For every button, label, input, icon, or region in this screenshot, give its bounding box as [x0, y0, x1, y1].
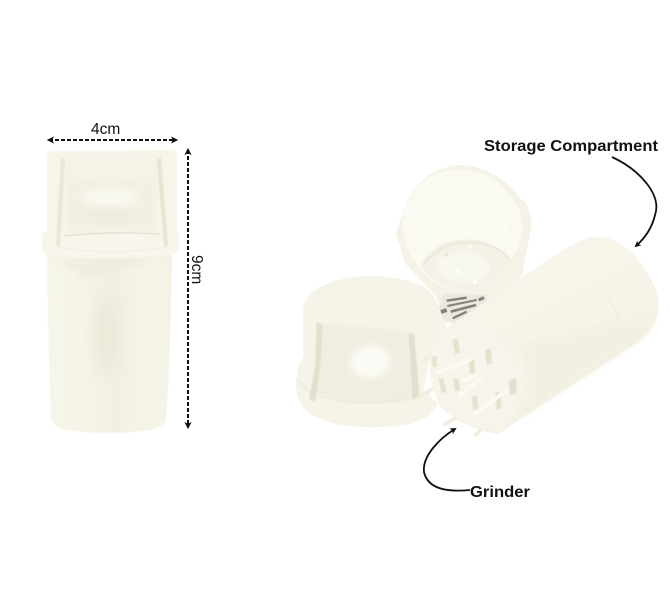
- lid slots: [56, 157, 65, 246]
- lid collar: [42, 232, 179, 258]
- open storage cup: [396, 165, 532, 323]
- height label: 9cm: [188, 255, 205, 284]
- product: disassembled parts: [296, 165, 659, 435]
- width dimension arrow: [49, 139, 176, 141]
- lid piece: [296, 276, 447, 427]
- arrow: grinder: [424, 429, 470, 491]
- arrow: storage compartment: [612, 157, 656, 246]
- label: grinder: Grinder: [470, 484, 530, 501]
- container lid: [47, 150, 177, 238]
- grinder teeth end: [421, 324, 521, 435]
- storage tube: [430, 237, 659, 434]
- height dimension arrow: [187, 150, 189, 427]
- label: storage compartment: Storage Compartment: [484, 138, 658, 155]
- product: assembled container: [42, 150, 179, 433]
- barcode label: [438, 293, 487, 323]
- width label: 4cm: [91, 121, 120, 138]
- container body: [47, 252, 172, 433]
